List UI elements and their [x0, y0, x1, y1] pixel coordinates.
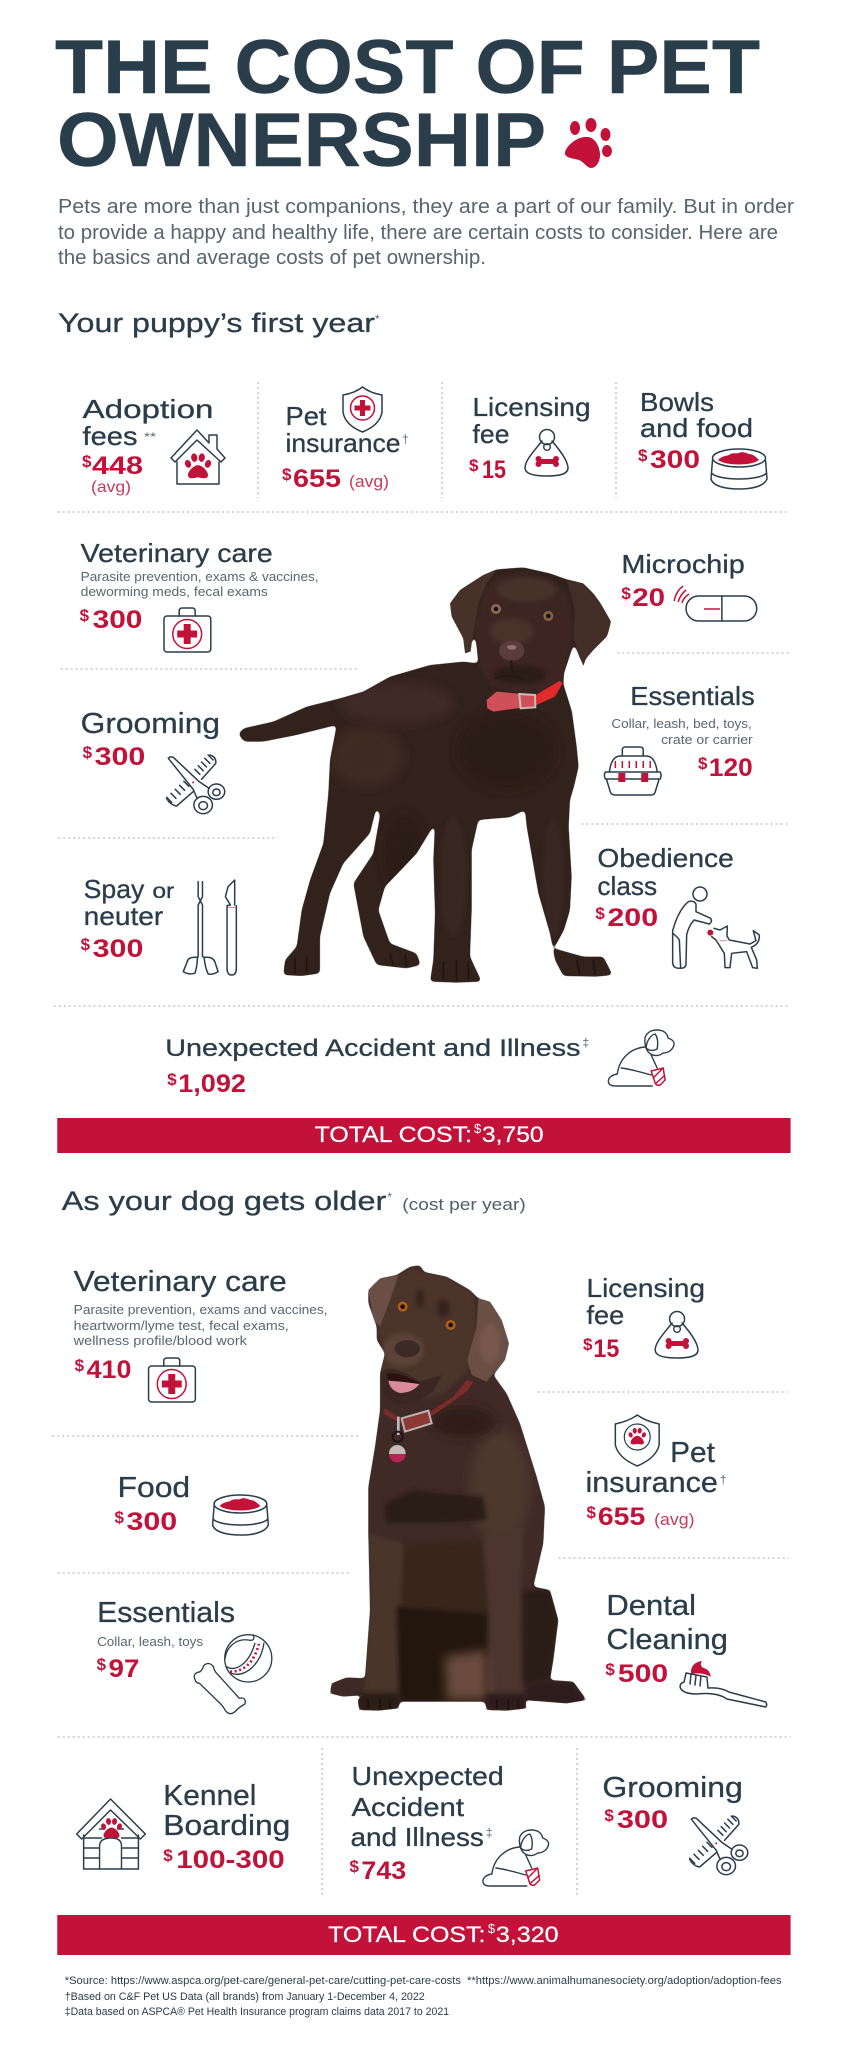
item: licensing fee: 15 [482, 456, 506, 484]
intro paragraph: Pets are more than just companions, they are a part of our family. But in order [58, 196, 794, 218]
item: microchip: $ [621, 584, 631, 603]
total cost bar first year: TOTAL COST: [315, 1122, 472, 1147]
total cost bar older: TOTAL COST: [328, 1922, 485, 1947]
icon: dog with bandaged leg older [483, 1830, 549, 1886]
item: obedience class: $ [595, 904, 605, 923]
item: dental cleaning: 500 [618, 1660, 668, 1688]
item: microchip: 20 [632, 584, 665, 612]
item: veterinary care: $ [80, 606, 90, 625]
item: kennel boarding: Kennel [163, 1780, 256, 1812]
item: spay or neuter: or [152, 880, 174, 903]
item: bowls and food: Bowls [640, 387, 714, 417]
icon: house with paw [171, 430, 225, 484]
item: bowls and food: 300 [650, 446, 700, 474]
icon: kennel [77, 1799, 145, 1869]
icon: scissors and comb older [690, 1816, 748, 1875]
item: grooming [81, 708, 220, 771]
item: unexpected accident and illness: Unexpected Accident and Illness [165, 1035, 581, 1062]
footnotes: ‡Data based on ASPCA® Pet Health Insurance program claims data 2017 to 2021 [65, 2006, 449, 2018]
item: dental cleaning: Cleaning [606, 1624, 728, 1656]
icon: ball and bone [194, 1635, 272, 1714]
item: essentials older: 97 [109, 1655, 139, 1683]
item: bowls and food: and food [640, 413, 753, 443]
item: grooming older: 300 [617, 1806, 668, 1834]
total cost bar older [57, 1915, 791, 1955]
icon: pet carrier [604, 747, 661, 795]
item: essentials: Collar, leash, bed, toys, [611, 716, 752, 731]
title: THE COST OF PET [55, 25, 760, 110]
item: pet insurance older [585, 1437, 727, 1531]
item: food: 300 [126, 1508, 177, 1536]
item: veterinary care: Parasite prevention, exams & vaccines, [81, 569, 319, 584]
icon: dog with bandaged leg [608, 1030, 674, 1086]
footnotes: *Source: https://www.aspca.org/pet-care/general-pet-care/cutting-pet-care-costs [65, 1975, 462, 1987]
item: pet insurance: $ [282, 465, 292, 484]
item: essentials older: Collar, leash, toys [97, 1634, 204, 1649]
icon: bone tag older [655, 1312, 698, 1358]
icon: toothbrush [680, 1661, 767, 1707]
item: pet insurance: † [402, 432, 409, 446]
heading: as your dog gets older: * [387, 1190, 392, 1204]
icon: food bowl [711, 449, 767, 489]
section dividers older dog [52, 1392, 791, 1897]
item: pet insurance: (avg) [349, 472, 389, 491]
item: veterinary care: 300 [93, 606, 142, 634]
item: unexpected accident older: Accident [351, 1794, 465, 1822]
item: pet insurance: insurance [286, 428, 400, 458]
item: unexpected accident and illness: 1,092 [178, 1070, 246, 1098]
item: dental cleaning: Dental [606, 1590, 696, 1622]
item: spay or neuter: 300 [93, 935, 143, 963]
item: spay or neuter: $ [81, 935, 91, 954]
item: adoption fees: $ [82, 452, 92, 471]
footnotes [65, 1975, 782, 2018]
intro paragraph [58, 196, 794, 269]
item: adoption fees: ** [144, 430, 156, 444]
icon: red paw print [565, 118, 612, 168]
item: obedience class: Obedience [597, 845, 734, 873]
item: microchip: Microchip [621, 551, 745, 579]
item: grooming: $ [83, 743, 93, 762]
item: veterinary care: Veterinary care [81, 540, 273, 568]
item: grooming older: $ [604, 1806, 614, 1825]
item: kennel boarding: $ [163, 1846, 173, 1865]
item: dental cleaning [605, 1590, 728, 1688]
item: pet insurance older: (avg) [654, 1510, 695, 1529]
item: unexpected accident older [349, 1763, 504, 1885]
total cost bar first year [57, 1118, 791, 1153]
item: pet insurance older: † [720, 1473, 727, 1487]
item: pet insurance older: Pet [670, 1437, 715, 1469]
item: licensing older: fee [586, 1302, 624, 1330]
item: licensing fee: fee [472, 419, 510, 449]
item: licensing fee [469, 392, 590, 484]
item: adoption fees: 448 [92, 452, 143, 480]
item: bowls and food [638, 387, 753, 474]
icon: food bowl older [213, 1495, 268, 1535]
item: licensing older: 15 [593, 1335, 619, 1363]
item: essentials older [97, 1597, 235, 1683]
total cost bar older: 3,320 [496, 1922, 559, 1947]
total cost bar older: $ [488, 1921, 495, 1936]
title [55, 25, 760, 183]
footnotes: **https://www.animalhumanesociety.org/adoption/adoption-fees [467, 1975, 782, 1987]
item: unexpected accident and illness: ‡ [582, 1036, 589, 1050]
item: unexpected accident older: and Illness [350, 1824, 484, 1852]
item: bowls and food: $ [638, 446, 648, 465]
item: unexpected accident older: $ [349, 1857, 359, 1876]
icon: shield with cross [343, 387, 382, 432]
item: kennel boarding [163, 1780, 290, 1874]
item: essentials: crate or carrier [661, 732, 753, 747]
icon: surgical tools [183, 880, 237, 975]
item: licensing older: $ [583, 1335, 593, 1354]
item: pet insurance [282, 401, 409, 493]
item: grooming older [602, 1772, 743, 1834]
item: essentials: $ [698, 754, 708, 773]
heading: puppy's first year: * [375, 312, 380, 326]
item: veterinary care [80, 540, 319, 634]
heading: as your dog gets older: As your dog gets older [62, 1186, 386, 1216]
intro paragraph: to provide a happy and healthy life, there are certain costs to consider. Here are [58, 222, 778, 244]
total cost bar first year: 3,750 [482, 1122, 544, 1147]
icon: person training dog [673, 887, 759, 968]
item: kennel boarding: 100-300 [176, 1846, 285, 1874]
intro paragraph: the basics and average costs of pet ownership. [58, 247, 486, 269]
item: obedience class: class [597, 873, 657, 901]
item: veterinary care older: 410 [87, 1356, 131, 1384]
icon: first aid kit [164, 608, 211, 652]
item: licensing older [583, 1275, 705, 1363]
item: spay or neuter [81, 876, 174, 963]
item: grooming: Grooming [81, 708, 220, 740]
item: licensing fee: Licensing [472, 392, 590, 422]
item: spay or neuter: neuter [84, 903, 164, 931]
item: pet insurance older: insurance [585, 1467, 718, 1499]
item: food [115, 1472, 190, 1536]
item: unexpected accident and illness [165, 1035, 589, 1098]
item: essentials older: $ [97, 1655, 107, 1674]
item: obedience class [595, 845, 734, 932]
item: veterinary care older: Veterinary care [74, 1266, 287, 1298]
icon: first aid kit older [149, 1358, 195, 1402]
item: essentials older: Essentials [97, 1597, 235, 1629]
item: grooming older: Grooming [602, 1772, 743, 1804]
item: pet insurance: 655 [293, 465, 341, 493]
item: adoption fees: Adoption [82, 394, 214, 424]
heading: as your dog gets older [62, 1186, 526, 1216]
item: veterinary care older [73, 1266, 328, 1384]
item: unexpected accident and illness: $ [167, 1070, 177, 1089]
icon: shield with paw [615, 1415, 659, 1466]
item: food: Food [117, 1472, 190, 1504]
item: essentials: 120 [709, 754, 753, 782]
item: adoption fees: (avg) [91, 479, 131, 496]
item: essentials: Essentials [630, 683, 755, 711]
icon: microchip capsule [674, 586, 757, 621]
content aligned to section grid [52, 512, 791, 2018]
item: kennel boarding: Boarding [163, 1810, 290, 1842]
heading: puppy's first year: Your puppy’s first year [58, 308, 375, 338]
item: pet insurance: Pet [286, 401, 327, 431]
heading: as your dog gets older: (cost per year) [402, 1195, 526, 1214]
item: adoption fees: fees [82, 421, 138, 451]
item: pet insurance older: 655 [598, 1503, 645, 1531]
title: OWNERSHIP [57, 98, 546, 183]
item: veterinary care older: $ [75, 1356, 85, 1375]
section dividers first year [54, 512, 791, 1006]
item: licensing older: Licensing [586, 1275, 705, 1303]
item: unexpected accident older: ‡ [486, 1826, 493, 1840]
item: veterinary care: deworming meds, fecal exams [81, 584, 268, 599]
top row dividers [258, 382, 616, 498]
item: grooming: 300 [95, 743, 145, 771]
puppy photo [238, 567, 613, 983]
item: spay or neuter: Spay [84, 876, 144, 904]
item: unexpected accident older: Unexpected [351, 1763, 504, 1791]
total cost bar first year: $ [474, 1121, 481, 1136]
item: pet insurance older: $ [586, 1503, 596, 1522]
item: adoption fees [82, 394, 214, 496]
item: veterinary care older: wellness profile/blood work [73, 1333, 248, 1348]
item: microchip [621, 551, 745, 612]
item: licensing fee: $ [469, 456, 479, 475]
item: veterinary care older: heartworm/lyme test, fecal exams, [74, 1318, 289, 1333]
footnotes: †Based on C&F Pet US Data (all brands) from January 1-December 4, 2022 [65, 1991, 425, 2003]
item: unexpected accident older: 743 [361, 1857, 406, 1885]
item: obedience class: 200 [607, 904, 658, 932]
icon: scissors and comb [167, 755, 225, 814]
item: food: $ [115, 1508, 124, 1527]
item: dental cleaning: $ [605, 1660, 615, 1679]
icon: bone tag [525, 430, 568, 476]
older dog photo [330, 1265, 587, 1711]
item: veterinary care older: Parasite prevention, exams and vaccines, [74, 1302, 328, 1317]
item: essentials [611, 683, 755, 782]
